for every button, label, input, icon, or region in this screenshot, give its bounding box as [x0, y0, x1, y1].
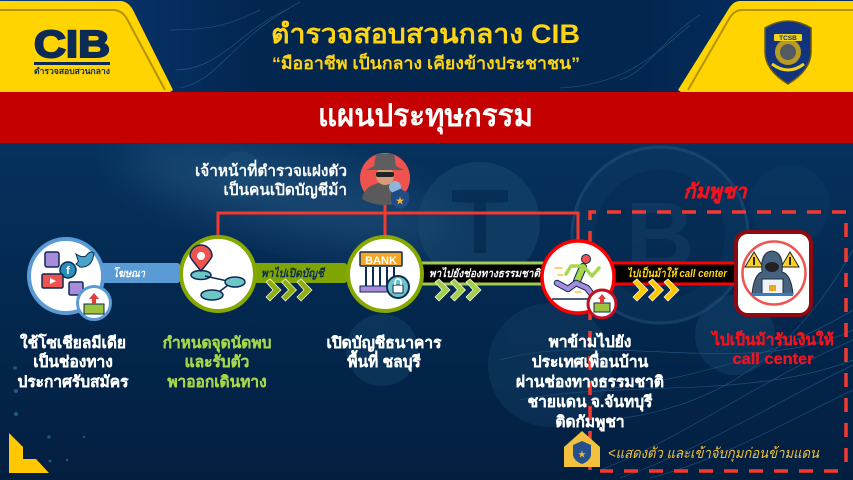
note: surrender before crossing: <แสดงตัว และเข้าจับกุมก่อนข้ามแดน [608, 445, 820, 462]
icon: police envelope: ★ [578, 450, 586, 459]
caption: bank account: พื้นที่ ชลบุรี [347, 350, 421, 372]
caption: meeting point: และรับตัว [185, 354, 249, 371]
red connector lines [218, 200, 578, 241]
coin: bitcoin watermark [572, 147, 748, 323]
TCSB police badge: TCSB [779, 35, 797, 42]
caption: social media: ใช้โซเชียลมีเดีย [20, 333, 126, 352]
arrow: to natural border crossing: พาไปยังช่องทางธรรมชาติ [429, 266, 541, 280]
arrow: advertise: โฆษณา [113, 266, 146, 280]
icon: meeting point circle [181, 237, 255, 311]
icon: undercover officer: ★ [395, 196, 405, 206]
officer caption: เจ้าหน้าที่ตำรวจแฝงตัว [195, 159, 347, 180]
dashed Cambodia box [590, 212, 846, 471]
left yellow header tab [0, 1, 173, 92]
arrow: to open account: พาไปเปิดบัญชี [261, 266, 326, 280]
coin: watermark lower [216, 151, 830, 427]
caption: social media [18, 333, 129, 391]
red banner: แผนประทุษกรรม [318, 98, 533, 135]
arrow: to natural border crossing [418, 263, 556, 301]
caption: meeting point [163, 334, 272, 391]
caption: social media: เป็นช่องทาง [33, 351, 113, 371]
arrow: call center mule [612, 263, 747, 301]
right yellow header tab [678, 1, 853, 92]
caption: bank account [327, 334, 442, 372]
caption: meeting point: กำหนดจุดนัดพบ [163, 334, 272, 353]
CIB logo: CIB [34, 24, 110, 66]
icon: social media circle [29, 239, 110, 320]
caption: call center mule: call center [732, 351, 814, 368]
red banner [0, 92, 853, 143]
icon: bank circle [348, 237, 422, 311]
caption: border crossing: ประเทศเพื่อนบ้าน [532, 350, 649, 371]
arrow: call center mule: ไปเป็นม้าให้ call center [627, 266, 728, 280]
coin: tether watermark [418, 162, 540, 284]
CIB logo [34, 24, 110, 76]
caption: border crossing [516, 332, 664, 433]
officer caption: เป็นคนเปิดบัญชีม้า [223, 179, 347, 199]
icon: runner circle [542, 241, 616, 318]
arrow: advertise [100, 263, 190, 283]
caption: social media: ประกาศรับสมัคร [18, 374, 129, 391]
caption: meeting point: พาออกเดินทาง [167, 373, 267, 391]
CIB logo: ตำรวจสอบสวนกลาง [34, 66, 110, 76]
icon: hacker card [736, 232, 811, 315]
caption: border crossing: ชายแดน จ.จันทบุรี [528, 393, 653, 412]
icon: police envelope [564, 431, 600, 467]
title: ตำรวจสอบสวนกลาง CIB [271, 19, 580, 49]
icon: undercover officer [360, 153, 410, 209]
officer caption [195, 159, 347, 199]
caption: border crossing: พาข้ามไปยัง [549, 332, 631, 351]
arrow: to open account [250, 263, 357, 301]
caption: bank account: เปิดบัญชีธนาคาร [327, 334, 442, 352]
icon: social media circle: f [66, 265, 70, 277]
caption: call center mule: ไปเป็นม้ารับเงินให้ [710, 329, 834, 349]
TCSB police badge [765, 21, 811, 84]
caption: border crossing: ติดกัมพูชา [555, 413, 625, 433]
subtitle: “มืออาชีพ เป็นกลาง เคียงข้างประชาชน” [272, 51, 580, 73]
Cambodia label: กัมพูชา [683, 181, 748, 204]
caption: border crossing: ผ่านช่องทางธรรมชาติ [516, 373, 664, 391]
coin: bitcoin watermark: B [626, 183, 694, 289]
caption: call center mule [710, 329, 834, 368]
icon: bank circle: BANK [365, 255, 397, 267]
corner yellow logo mark [9, 433, 49, 473]
